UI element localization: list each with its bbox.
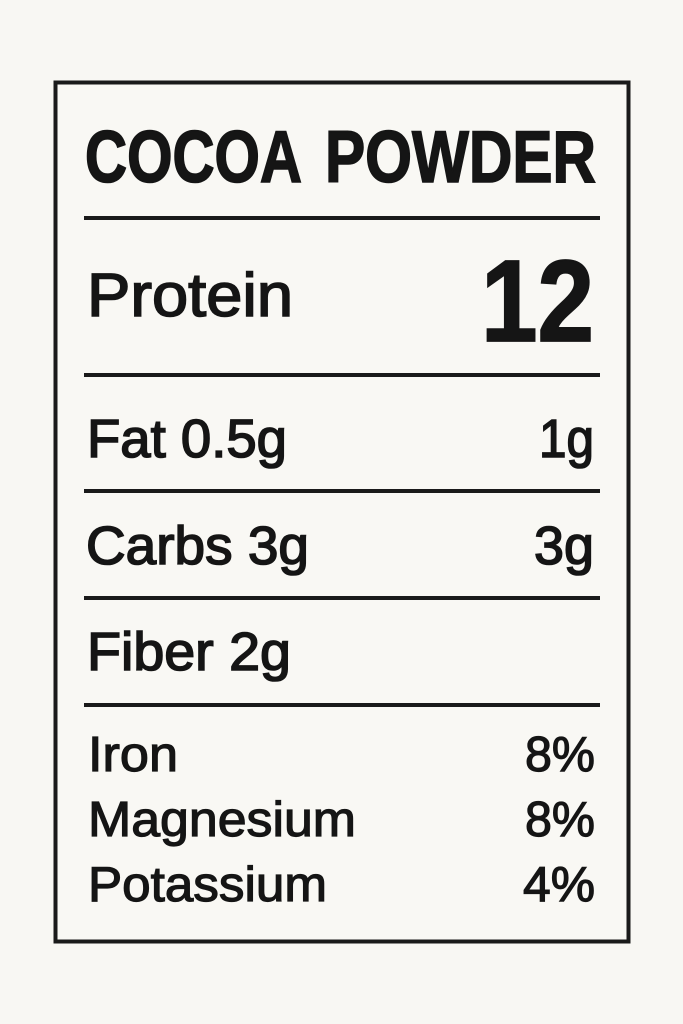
row: protein bbox=[87, 236, 594, 366]
iron value: 8% bbox=[525, 728, 595, 782]
carbs value: 3g bbox=[534, 516, 594, 576]
protein label: Protein bbox=[87, 261, 293, 329]
potassium value: 4% bbox=[523, 858, 595, 912]
row: magnesium bbox=[88, 793, 595, 847]
panel: label frame bbox=[56, 82, 628, 942]
row: potassium bbox=[88, 858, 595, 912]
fat value: 1g bbox=[539, 409, 594, 469]
row: iron bbox=[88, 728, 595, 782]
title: POWDER bbox=[325, 117, 596, 198]
magnesium label: Magnesium bbox=[88, 793, 356, 847]
magnesium value: 8% bbox=[525, 793, 595, 847]
row: fiber: Fiber 2g bbox=[87, 622, 291, 682]
fat label: Fat 0.5g bbox=[87, 409, 287, 469]
potassium label: Potassium bbox=[88, 858, 327, 912]
row: carbs bbox=[86, 516, 594, 576]
carbs label: Carbs 3g bbox=[86, 516, 309, 576]
title bbox=[85, 117, 596, 198]
protein value: 12 bbox=[481, 236, 594, 366]
title: COCOA bbox=[85, 117, 302, 198]
iron label: Iron bbox=[88, 728, 178, 782]
row: fat bbox=[87, 409, 594, 469]
